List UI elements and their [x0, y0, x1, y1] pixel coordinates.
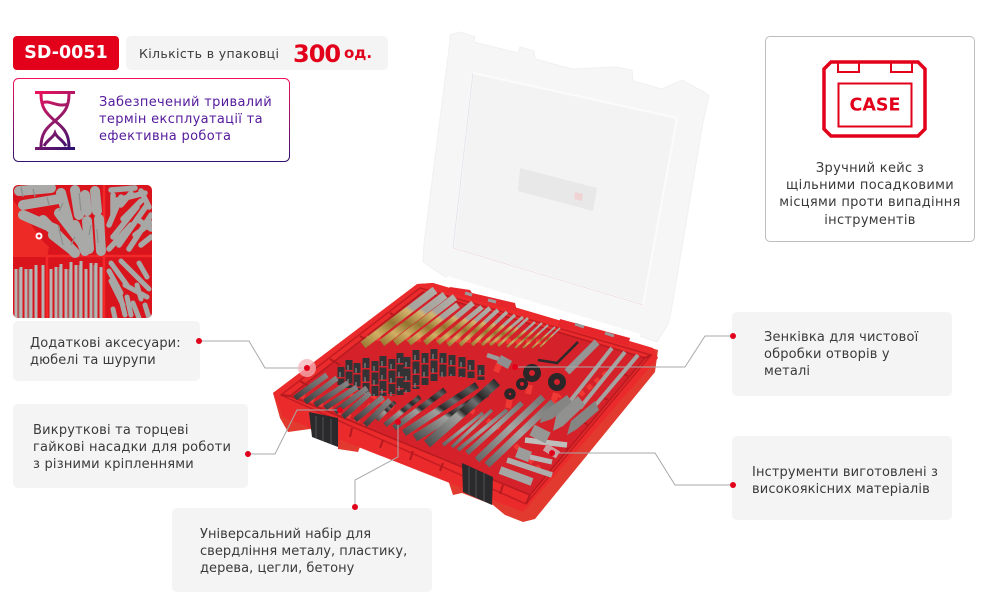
- callout text: [30, 336, 181, 368]
- callout line: universal drilling set: [352, 419, 401, 510]
- callout line: accessories: [196, 338, 316, 377]
- icon: hourglass: [35, 91, 75, 150]
- callout text: Універсальний набір для: [200, 527, 371, 542]
- callout line: quality materials: [549, 450, 736, 488]
- case tray: [273, 283, 658, 522]
- clip: front latch: [462, 463, 493, 505]
- callout line: countersink: [512, 333, 736, 370]
- tool holder ribs: [300, 338, 610, 470]
- callout text: Інструменти виготовлені з: [752, 465, 938, 480]
- case description: [779, 161, 961, 228]
- callout text: обробки отворів у: [764, 347, 890, 362]
- panel border: [13, 78, 290, 162]
- callout text: високоякісних матеріалів: [752, 482, 930, 497]
- gold drill bits: [363, 290, 560, 348]
- panel: convenient case: [765, 36, 975, 242]
- callout text: гайкові насадки для роботи: [33, 440, 231, 455]
- benefit text: [99, 95, 272, 144]
- quantity value: 300: [293, 40, 340, 68]
- masonry bits: [443, 397, 553, 465]
- callout line: screwdriver bits: [245, 407, 343, 457]
- callout text: дюбелі та шурупи: [30, 353, 156, 368]
- benefit text: ефективна робота: [99, 129, 231, 144]
- hex shank bits: [295, 375, 390, 425]
- panel: quantity in package: [126, 36, 388, 70]
- callout: countersink: [732, 312, 952, 396]
- case description: Зручний кейс з: [816, 161, 924, 176]
- callout: quality materials: [732, 436, 952, 520]
- callout text: [764, 330, 918, 379]
- callout text: Викруткові та торцеві: [33, 423, 189, 438]
- accessories: rings, hex key, socket, quick connector: [487, 342, 597, 398]
- callout text: Зенківка для чистової: [764, 330, 918, 345]
- case description: інструментів: [824, 213, 916, 228]
- benefit text: термін експлуатації та: [99, 112, 263, 127]
- benefit text: Забезпечений тривалий: [99, 95, 272, 110]
- nut setters: [500, 430, 567, 482]
- icon: case: [822, 60, 927, 138]
- callout text: [33, 423, 231, 472]
- quantity unit: од.: [344, 44, 372, 62]
- black twist drills: [377, 382, 497, 444]
- badge: article code: [13, 36, 119, 70]
- case lid: [423, 32, 709, 342]
- badge: article code: SD-0051: [24, 43, 108, 63]
- callout text: дерева, цегли, бетону: [200, 561, 354, 576]
- quantity label: Кількість в упаковці: [139, 46, 279, 61]
- icon: case: CASE: [850, 96, 900, 116]
- callout text: Додаткові аксесуари:: [30, 336, 181, 351]
- spade bits: [540, 348, 638, 435]
- callout: universal drilling set: [172, 508, 432, 592]
- photo: dowels and screws: [13, 185, 152, 318]
- callout text: [200, 527, 407, 576]
- callout: accessories: [13, 321, 200, 381]
- callout text: металі: [764, 364, 810, 379]
- case description: щільними посадковими: [786, 178, 954, 193]
- panel: long service life: [13, 78, 290, 162]
- callout text: свердління металу, пластику,: [200, 544, 407, 559]
- screwdriver bit grid: [340, 349, 481, 396]
- callout text: з різними кріпленнями: [33, 457, 194, 472]
- clip: left latch: [309, 412, 338, 447]
- callout text: [752, 465, 938, 497]
- case description: місцями проти випадіння: [779, 195, 961, 210]
- callout: screwdriver and socket bits: [13, 404, 248, 488]
- hinges: [446, 287, 630, 346]
